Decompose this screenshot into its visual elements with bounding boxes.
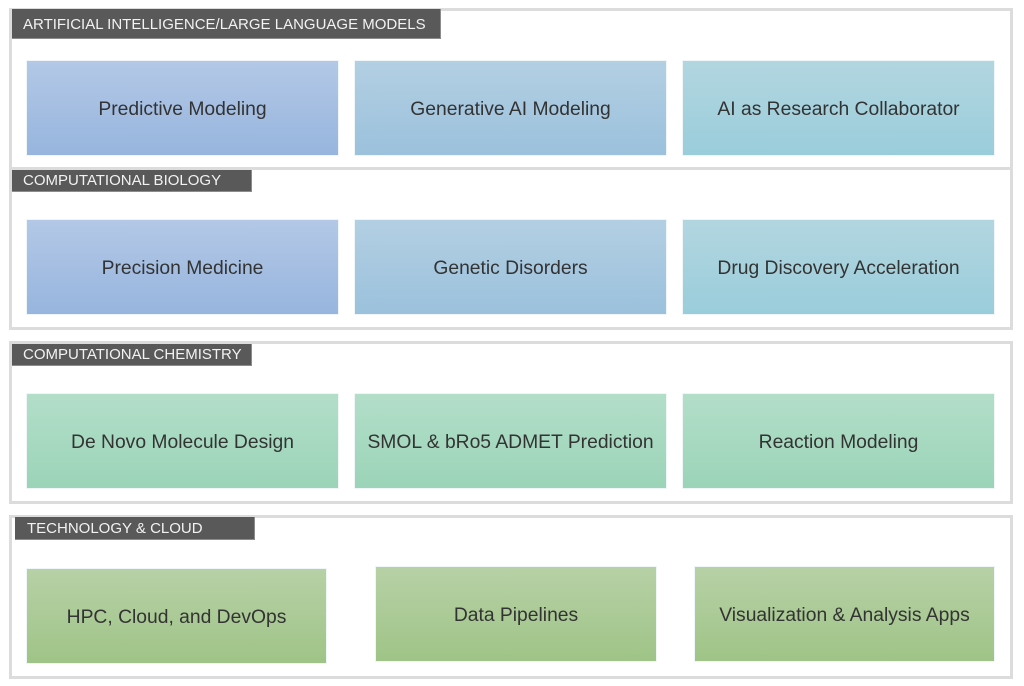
box: data pipelines: Data Pipelines	[454, 604, 578, 626]
box: de novo molecule design	[26, 393, 339, 489]
panel: computational biology	[9, 167, 1013, 330]
heading: computational chemistry: COMPUTATIONAL CHEMISTRY	[23, 346, 242, 363]
box: generative AI modeling: Generative AI Modeling	[410, 98, 611, 120]
panel: technology and cloud	[9, 515, 1013, 679]
box: genetic disorders: Genetic Disorders	[433, 258, 588, 278]
box: AI as research collaborator: AI as Research Collaborator	[717, 98, 960, 120]
panel: computational chemistry	[9, 341, 1013, 504]
box: SMOL and bRo5 ADMET prediction: SMOL & bRo5 ADMET Prediction	[367, 432, 654, 452]
box: reaction modeling	[682, 393, 995, 489]
box: SMOL and bRo5 ADMET prediction	[354, 393, 667, 489]
panel: artificial intelligence	[9, 8, 1013, 170]
box: precision medicine	[26, 219, 339, 315]
box: precision medicine: Precision Medicine	[102, 258, 263, 278]
box: visualization and analysis apps	[694, 566, 995, 662]
box: HPC, cloud, and DevOps	[26, 568, 327, 664]
box: HPC, cloud, and DevOps: HPC, Cloud, and DevOps	[67, 606, 286, 628]
box: reaction modeling: Reaction Modeling	[759, 432, 918, 452]
box: visualization and analysis apps: Visualization & Analysis Apps	[719, 604, 970, 626]
box: AI as research collaborator	[682, 60, 995, 156]
box: de novo molecule design: De Novo Molecule Design	[71, 432, 294, 452]
box: drug discovery acceleration	[682, 219, 995, 315]
box: drug discovery acceleration: Drug Discovery Acceleration	[717, 258, 960, 278]
heading: technology and cloud: TECHNOLOGY & CLOUD	[27, 520, 203, 537]
heading: computational biology	[12, 170, 252, 192]
box: generative AI modeling	[354, 60, 667, 156]
box: predictive modeling	[26, 60, 339, 156]
heading: artificial intelligence: ARTIFICIAL INTELLIGENCE/LARGE LANGUAGE MODELS	[23, 16, 426, 33]
box: genetic disorders	[354, 219, 667, 315]
box: data pipelines	[375, 566, 657, 662]
heading: computational biology: COMPUTATIONAL BIOLOGY	[23, 172, 221, 189]
heading: artificial intelligence	[12, 9, 441, 39]
heading: technology and cloud	[15, 517, 255, 540]
box: predictive modeling: Predictive Modeling	[98, 98, 267, 120]
